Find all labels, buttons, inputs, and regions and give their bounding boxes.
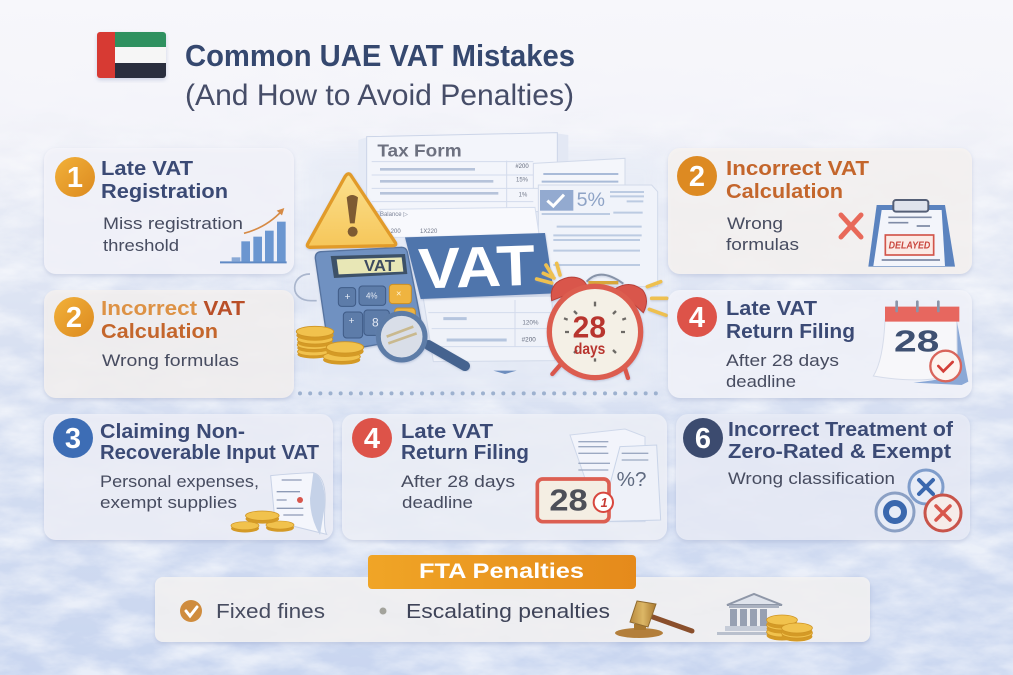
heading bbox=[728, 419, 953, 463]
card 4: late VAT return filing bbox=[342, 414, 667, 540]
calculator: + bbox=[345, 292, 351, 303]
description bbox=[100, 472, 259, 512]
item: fixed fines: Fixed fines bbox=[216, 601, 325, 623]
heading: Calculation bbox=[101, 321, 218, 343]
description: Wrong bbox=[727, 214, 783, 233]
description: exempt supplies bbox=[100, 493, 237, 512]
heading: Incorrect Treatment of bbox=[728, 419, 953, 441]
icon: rising bar chart bbox=[220, 208, 287, 262]
middle paper: Balance ▷ bbox=[380, 212, 408, 218]
percentage form paper: 5% bbox=[577, 190, 605, 211]
calculator: 8 bbox=[372, 316, 379, 330]
badge 6 bbox=[683, 418, 723, 458]
heading bbox=[100, 421, 319, 464]
icon: bank and coins bbox=[717, 594, 812, 642]
tax form paper: 15% bbox=[516, 178, 529, 184]
panel: FTA penalties bbox=[155, 555, 870, 642]
middle paper: 1X220 bbox=[420, 229, 438, 235]
middle paper: 200 bbox=[391, 229, 401, 235]
icon: receipt and coins bbox=[231, 473, 327, 535]
description: formulas bbox=[726, 235, 799, 254]
description bbox=[103, 214, 243, 255]
alarm clock bbox=[537, 263, 667, 378]
description: After 28 days bbox=[726, 351, 839, 370]
lower paper: #200 bbox=[522, 336, 536, 343]
item: fixed fines bbox=[180, 600, 325, 623]
heading: Return Filing bbox=[726, 321, 855, 343]
badge 2: 2 bbox=[66, 302, 82, 334]
heading: Return Filing bbox=[401, 442, 529, 464]
badge 4: 4 bbox=[364, 423, 380, 455]
heading bbox=[101, 158, 228, 203]
icon: delayed clipboard bbox=[868, 200, 955, 267]
middle paper bbox=[380, 207, 539, 237]
card 3: claiming non-recoverable input VAT bbox=[44, 414, 333, 540]
calculator: × bbox=[396, 289, 401, 299]
description: deadline bbox=[402, 493, 473, 512]
heading: Calculation bbox=[726, 181, 843, 203]
description: Wrong formulas bbox=[102, 351, 239, 370]
card 2 right: incorrect VAT calculation bbox=[668, 148, 972, 274]
icon: UAE flag bbox=[97, 32, 166, 78]
calculator: 4% bbox=[366, 291, 378, 300]
calculator: + bbox=[349, 316, 355, 327]
title: Common UAE VAT Mistakes bbox=[185, 38, 575, 73]
icon: calendar and documents: %? bbox=[617, 468, 647, 491]
calculator bbox=[315, 247, 423, 352]
lower paper bbox=[423, 296, 555, 374]
card 6: incorrect treatment of zero-rated and exempt bbox=[676, 414, 970, 540]
icon: calendar and documents bbox=[537, 429, 661, 522]
alarm clock: days bbox=[574, 341, 605, 358]
description: Wrong classification bbox=[728, 469, 895, 488]
description: Miss registration bbox=[103, 214, 243, 233]
warning triangle bbox=[307, 174, 396, 247]
coins bbox=[296, 326, 364, 365]
badge 6: 6 bbox=[695, 423, 711, 455]
icon: classification symbols bbox=[876, 470, 961, 531]
badge 3 bbox=[53, 418, 93, 458]
banner: FTA Penalties bbox=[368, 555, 636, 589]
subtitle: (And How to Avoid Penalties) bbox=[185, 79, 574, 112]
heading: Registration bbox=[101, 181, 228, 203]
tax form paper: #200 bbox=[515, 164, 529, 170]
header bbox=[97, 32, 575, 112]
calculator: VAT bbox=[364, 258, 395, 275]
central illustration: tax forms, VAT sign, calculator and clock bbox=[295, 133, 667, 393]
description: deadline bbox=[726, 372, 796, 391]
heading bbox=[726, 158, 869, 203]
heading: Late VAT bbox=[401, 421, 493, 443]
heading: Claiming Non- bbox=[100, 421, 245, 443]
magnifying glass bbox=[378, 313, 465, 366]
icon: calendar and documents: 28 bbox=[549, 483, 588, 517]
percentage form paper bbox=[533, 158, 658, 287]
badge 4 bbox=[677, 297, 717, 337]
description: Personal expenses, bbox=[100, 472, 259, 491]
description: threshold bbox=[103, 236, 179, 255]
icon: calendar 28 bbox=[873, 302, 968, 385]
heading bbox=[401, 421, 529, 464]
icon: calendar 28: 28 bbox=[894, 324, 939, 358]
dotted divider bbox=[300, 387, 662, 399]
card 2 left: incorrect VAT calculation bbox=[44, 290, 294, 398]
tax form paper: 1% bbox=[519, 192, 528, 198]
description bbox=[726, 351, 839, 391]
badge 4: 4 bbox=[689, 302, 705, 334]
card 4 right: late VAT return filing bbox=[668, 290, 972, 398]
heading: Zero-Rated & Exempt bbox=[728, 441, 951, 463]
description: After 28 days bbox=[401, 472, 515, 491]
badge 3: 3 bbox=[65, 423, 81, 455]
heading bbox=[101, 298, 245, 343]
icon: calendar and documents: 1 bbox=[601, 496, 608, 510]
heading: Incorrect VAT bbox=[726, 158, 869, 180]
banner: FTA Penalties: FTA Penalties bbox=[419, 560, 584, 583]
heading: Late VAT bbox=[726, 298, 817, 320]
alarm clock: 28 bbox=[573, 310, 606, 344]
badge 2 bbox=[54, 297, 94, 337]
icon: red cross bbox=[841, 215, 861, 237]
description bbox=[401, 472, 515, 512]
heading: Recoverable Input VAT bbox=[100, 442, 319, 464]
tax form paper bbox=[358, 133, 568, 212]
badge 1 bbox=[55, 157, 95, 197]
tax form paper: Tax Form bbox=[377, 141, 462, 161]
clip ring bbox=[295, 274, 317, 301]
lower paper: 120% bbox=[522, 320, 539, 327]
badge 1: 1 bbox=[67, 162, 83, 194]
icon: gavel bbox=[615, 601, 692, 638]
badge 4 bbox=[352, 418, 392, 458]
description bbox=[726, 214, 799, 254]
heading: Late VAT bbox=[101, 158, 193, 180]
badge 2 bbox=[677, 156, 717, 196]
badge 2: 2 bbox=[689, 161, 705, 193]
heading: Incorrect VAT bbox=[101, 298, 245, 320]
heading bbox=[726, 298, 855, 343]
card 1: late VAT registration bbox=[44, 148, 294, 274]
VAT sign: VAT bbox=[417, 234, 536, 302]
icon: delayed clipboard: DELAYED bbox=[889, 241, 931, 252]
item: escalating penalties: Escalating penalties bbox=[406, 601, 610, 623]
